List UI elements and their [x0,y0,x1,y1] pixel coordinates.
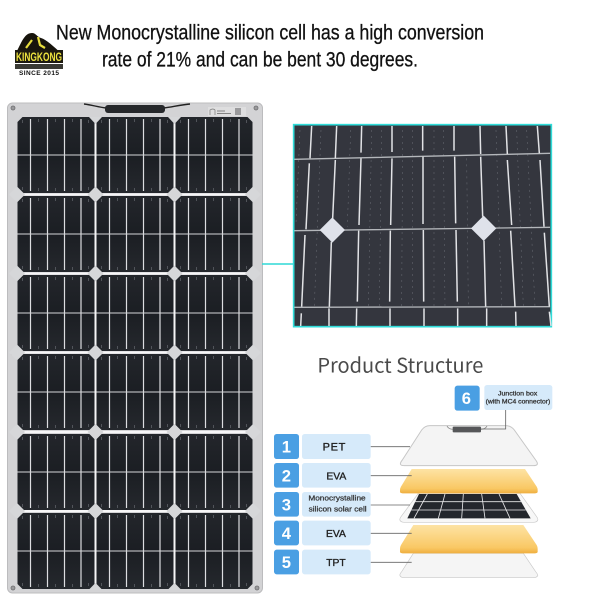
layer: PET sheet [400,426,537,466]
panel cable and junction box [84,104,190,113]
close-up fine grid fingers [296,130,535,307]
leader lines [371,410,506,562]
close-up vertical busbars [301,126,551,326]
row 3: Monocrystalline silicon solar cell: Monocrystalline [308,494,366,503]
layer: EVA upper [400,469,538,493]
layer: junction box [447,426,487,432]
close-up photo of cell [294,125,551,327]
row 2: EVA: 2 [282,466,291,485]
logo: KingKong [15,33,63,77]
logo: KingKong: KINGKONG [16,50,62,64]
layer: solar cell sheet [400,493,538,522]
row 4: EVA: 4 [282,524,292,543]
layer: TPT sheet [400,553,538,578]
logo tagline: SINCE 2015 [19,70,59,77]
row 5: TPT [274,550,371,574]
row 6: Junction box [455,385,552,411]
row 1: PET: PET [323,441,346,453]
row 5: TPT: 5 [282,553,291,572]
row 1: PET: 1 [282,437,291,456]
product structure diagram [274,349,552,578]
panel mounting holes [11,106,259,590]
row 3: Monocrystalline silicon solar cell: 3 [282,495,291,514]
row 1: PET [274,434,371,459]
row 2: EVA: EVA [326,471,346,482]
solar panel photo [8,103,262,593]
row 5: TPT: TPT [326,558,346,569]
close-up horizontal busbars [294,153,550,307]
row 6: Junction box: Junction box [498,391,537,397]
white gaps between cells [17,117,253,589]
cell corner diamonds [9,117,261,590]
solar cells grid [18,117,252,589]
row 6: Junction box: (with MC4 connector) [486,399,550,405]
panel label sticker [208,107,246,116]
row 2: EVA [274,463,371,488]
connector line to close-up [262,263,294,265]
logo mountain [17,33,62,54]
row 6: Junction box: 6 [462,389,471,408]
close-up diamonds [320,216,496,243]
title text [56,20,484,72]
logo name plate [15,50,63,63]
title text: rate of 21% and can be bent 30 degrees. [102,48,418,72]
layer: EVA lower [400,525,538,553]
heading: Product Structure: Product Structure [317,349,483,378]
row 4: EVA [274,521,371,545]
title text: New Monocrystalline silicon cell has a high conversion [56,20,484,44]
logo stripe [15,64,63,69]
row 3: Monocrystalline silicon solar cell [274,492,371,517]
row 3: Monocrystalline silicon solar cell: silicon solar cell [309,505,367,514]
row 4: EVA: EVA [326,529,346,540]
